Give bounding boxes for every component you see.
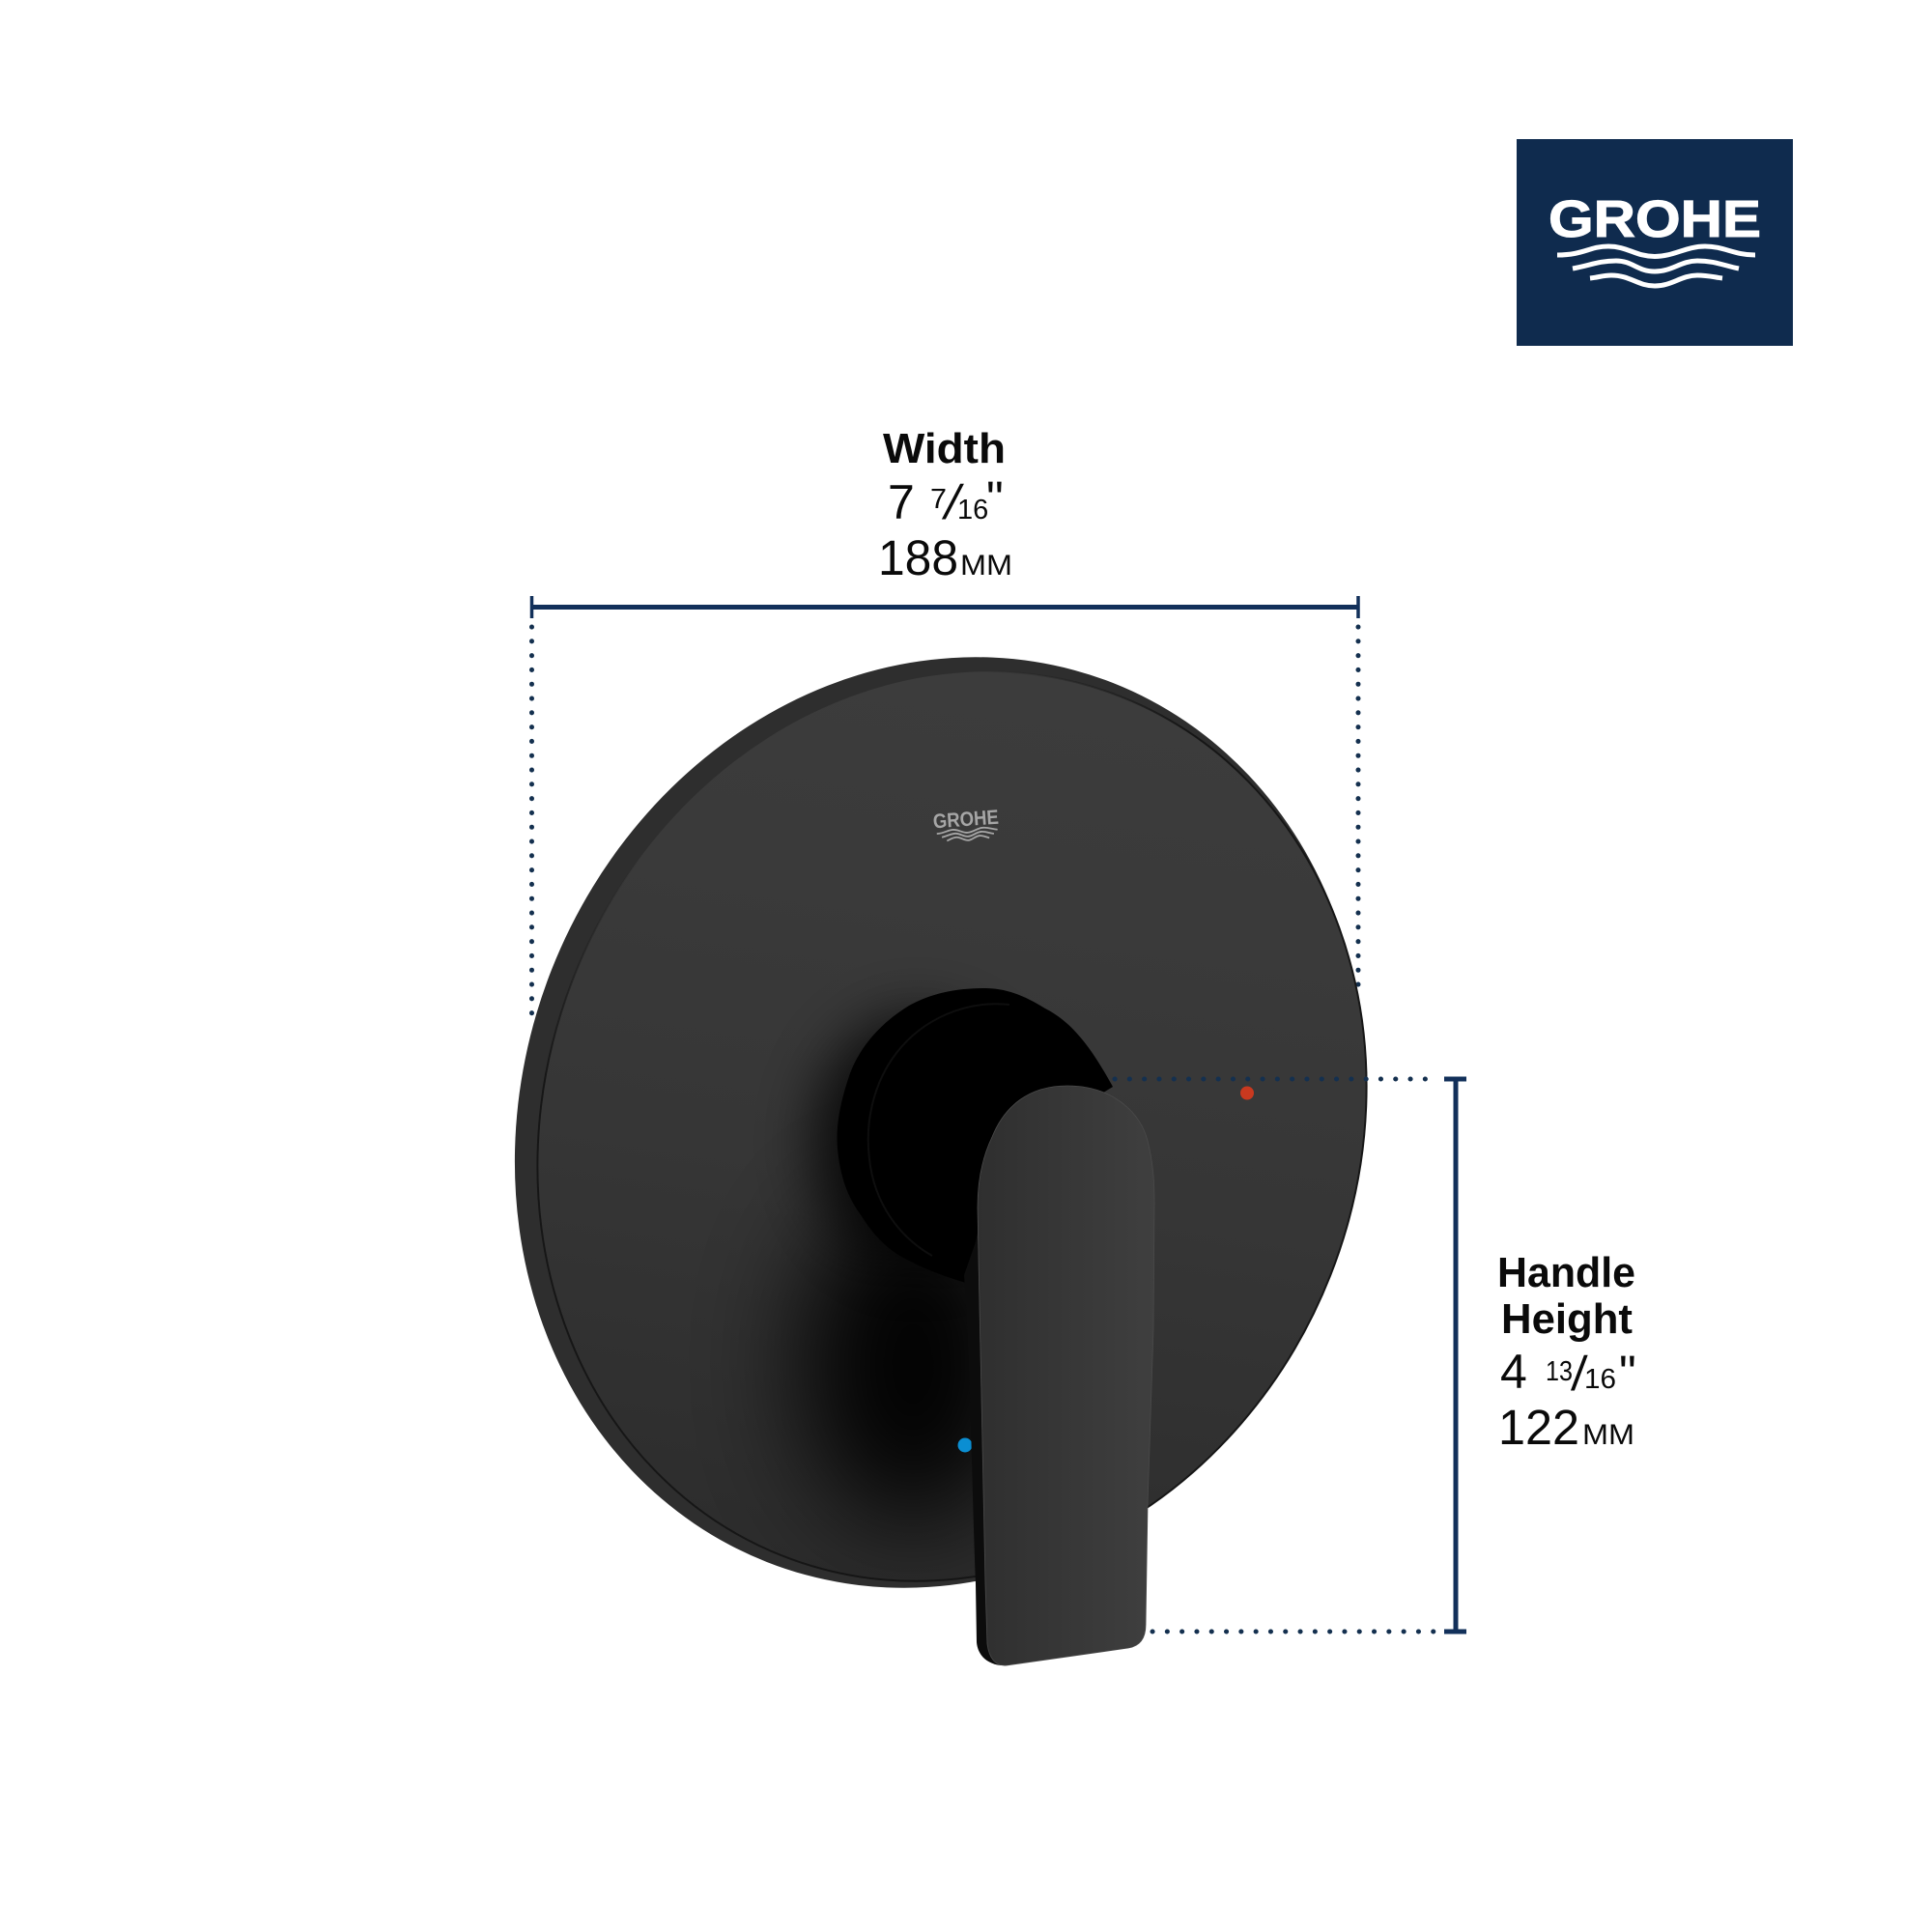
engraved logo on plate: GROHE [932,807,1000,833]
handle front face [978,1086,1154,1665]
width dimension line [531,596,1358,1016]
handle height label: 16 [1584,1364,1616,1395]
handle height dimension line [1444,1079,1466,1632]
handle height dots [1115,1079,1438,1632]
handle height label: 4 [1500,1345,1527,1399]
handle height label [1497,1249,1636,1455]
product: back rim of cover plate [379,530,1501,1715]
width label [878,425,1012,585]
handle height label: Handle [1497,1249,1635,1296]
handle side wall [964,1159,1005,1665]
handle height label: MM [1582,1419,1634,1451]
handle height label: Height [1501,1295,1633,1343]
width label: 188 [878,530,958,585]
width label: 7 [888,475,915,529]
engraved logo on plate [932,807,1000,842]
brand logo: GROHE [1548,190,1761,248]
width label: 16 [957,495,988,526]
brand logo [1517,139,1793,346]
handle height label: " [1619,1346,1636,1400]
handle height label: 122 [1498,1400,1579,1455]
product: front face of cover plate [405,548,1499,1705]
indicator: cold dot [958,1437,972,1453]
width label: " [986,471,1004,526]
width label: / [939,475,967,529]
handle height label: / [1570,1347,1589,1401]
handle height label: 13 [1546,1356,1573,1387]
product: hub behind handle [838,988,1113,1283]
product: shadow on the plate [802,1014,1024,1526]
width label: MM [960,550,1012,582]
product: handle lever [964,1086,1154,1665]
width label: 7 [930,484,947,515]
indicator: hot dot [1240,1086,1254,1099]
width label: Width [883,425,1006,472]
